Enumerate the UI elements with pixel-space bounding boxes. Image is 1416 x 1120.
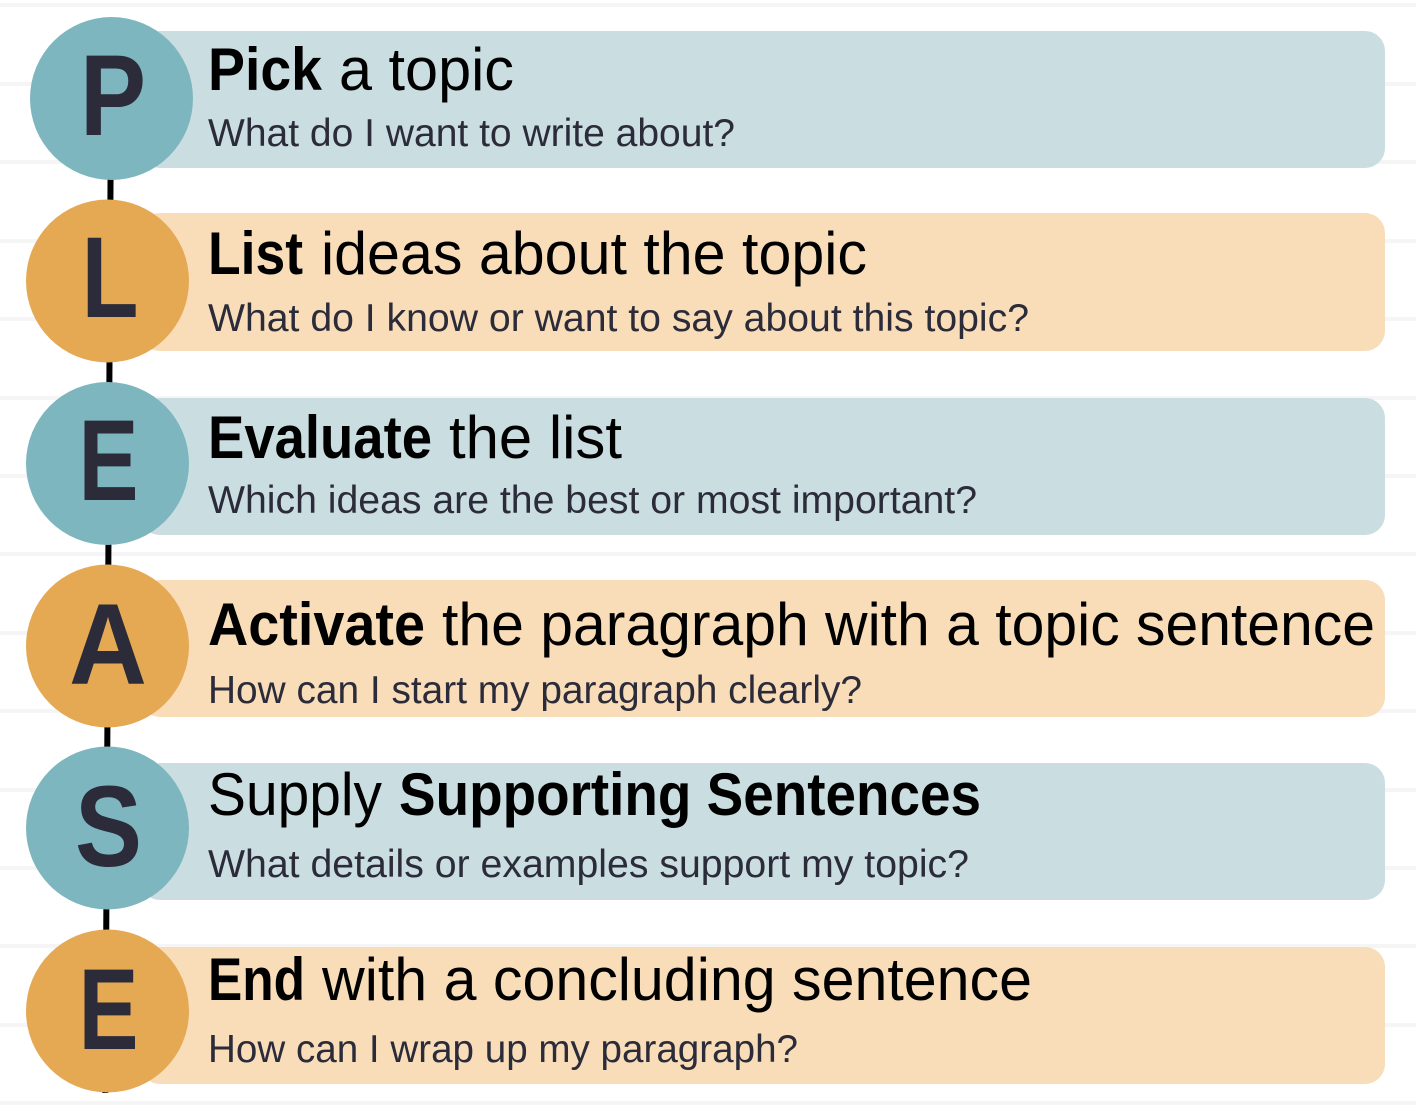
text: question 5: What details or examples support my topic? xyxy=(208,843,969,886)
heading: Pick a topic: Pick xyxy=(208,36,323,103)
text: question 3: Which ideas are the best or most important? xyxy=(208,479,977,522)
heading: Pick a topic: a topic xyxy=(339,36,514,103)
panel: List ideas xyxy=(26,200,1385,362)
heading: Activate the paragraph with a topic sentence: Activate xyxy=(208,591,425,658)
icon: letter P circle xyxy=(30,17,193,180)
heading: Activate the paragraph with a topic sentence: the paragraph with a topic sentence xyxy=(442,591,1375,658)
icon: letter E circle: E xyxy=(78,946,138,1074)
panel: Supply Supporting Sentences xyxy=(26,746,1385,910)
icon: letter E circle xyxy=(26,930,189,1092)
icon: letter L circle: L xyxy=(82,214,138,342)
heading: End with a concluding sentence: with a concluding sentence xyxy=(321,946,1032,1013)
heading: List ideas about the topic: ideas about the topic xyxy=(321,220,867,287)
heading: End with a concluding sentence: End xyxy=(208,946,305,1013)
icon: letter S circle: S xyxy=(75,763,142,891)
panel: Evaluate the list xyxy=(26,382,1385,545)
panel: Pick a topic xyxy=(30,17,1385,180)
text: question 6: How can I wrap up my paragraph? xyxy=(208,1028,798,1071)
text: question 2: What do I know or want to say about this topic? xyxy=(208,297,1029,340)
icon: letter P circle: P xyxy=(80,32,146,160)
text: question 4: How can I start my paragraph clearly? xyxy=(208,669,862,712)
icon: letter E circle xyxy=(26,382,189,545)
icon: letter S circle xyxy=(26,746,189,910)
icon: letter E circle: E xyxy=(78,397,138,525)
icon: letter L circle xyxy=(26,200,189,362)
heading: Supply Supporting Sentences: Supporting Sentences xyxy=(399,761,981,828)
heading: Evaluate the list: Evaluate xyxy=(208,404,432,471)
panel: Activate the paragraph xyxy=(26,564,1385,728)
heading: Pick a topic xyxy=(208,36,514,103)
heading: List ideas about the topic: List xyxy=(208,220,303,287)
text: question 1: What do I want to write about? xyxy=(208,112,735,155)
icon: letter A circle: A xyxy=(69,581,147,709)
heading: Supply Supporting Sentences: Supply xyxy=(208,761,382,828)
heading: Evaluate the list: the list xyxy=(449,404,622,471)
connector line xyxy=(105,98,111,1093)
panel: End with a concluding sentence xyxy=(26,930,1385,1092)
icon: letter A circle xyxy=(26,564,189,728)
heading: Evaluate the list xyxy=(208,404,622,471)
